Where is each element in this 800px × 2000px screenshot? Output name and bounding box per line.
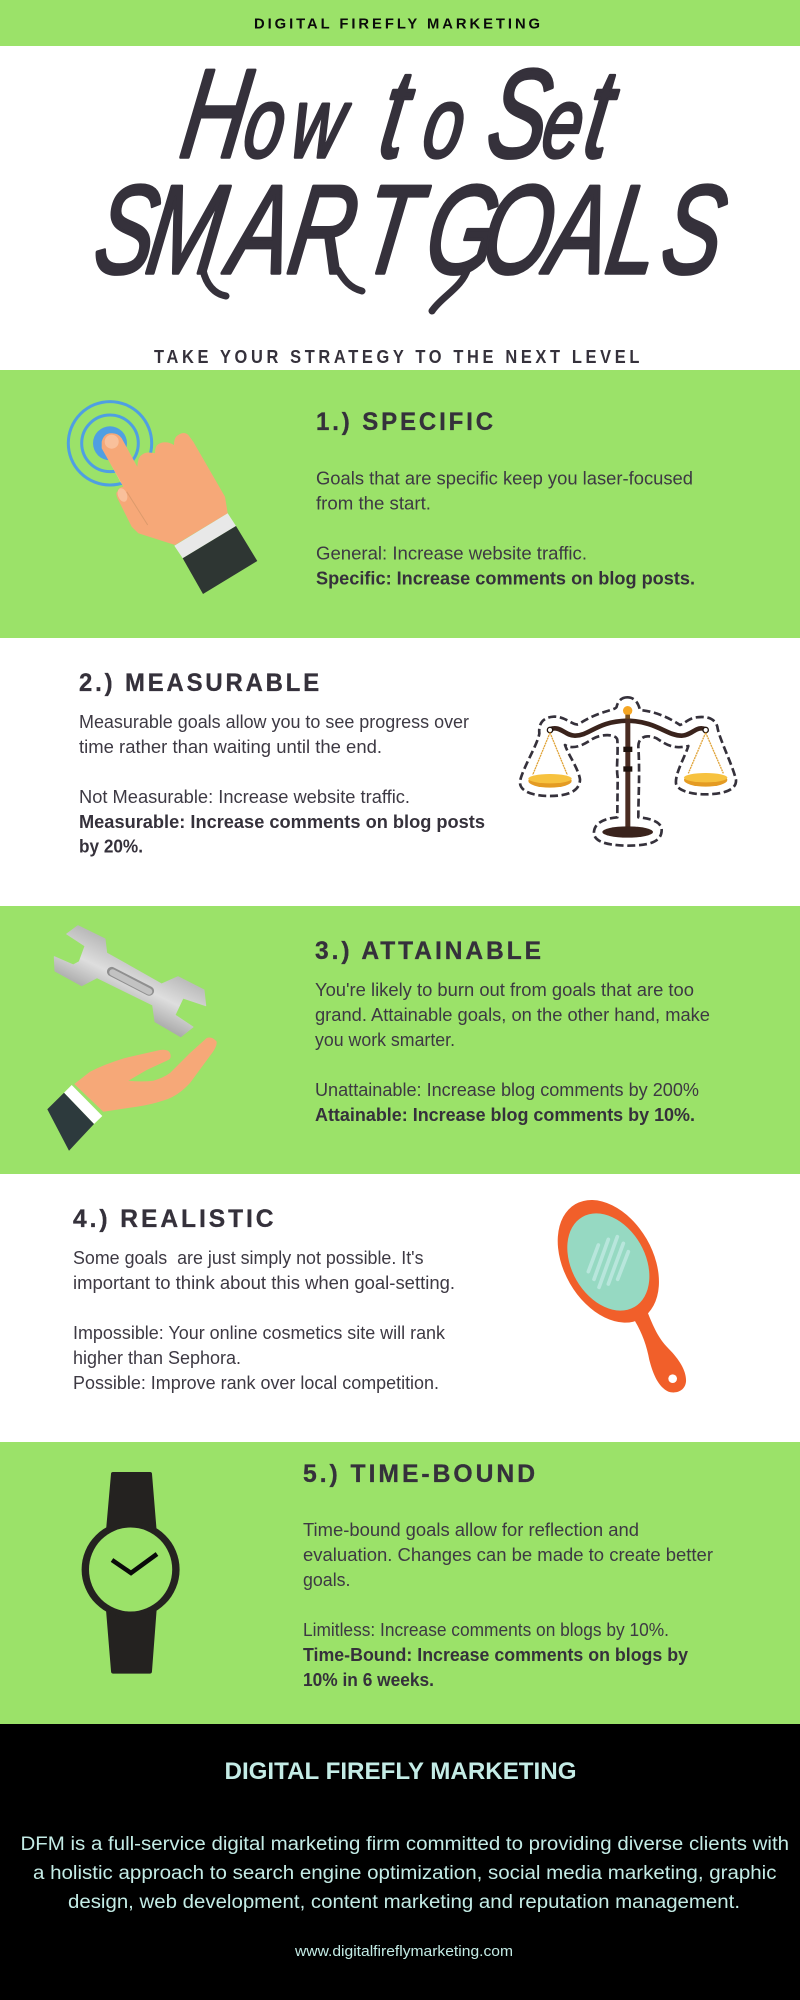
text block: time-bound: goals. xyxy=(303,1570,350,1590)
panel: realistic xyxy=(0,1174,800,1442)
footer description: a holistic approach to search engine optimization, social media marketing, graphic xyxy=(33,1863,777,1884)
icon: pointing hand xyxy=(68,402,257,594)
panel: footer xyxy=(0,1724,800,2000)
text block: realistic: Possible: Improve rank over local competition. xyxy=(73,1373,439,1393)
text block: realistic: higher than Sephora. xyxy=(73,1348,241,1368)
title: o xyxy=(417,67,493,179)
icon: wristwatch xyxy=(82,1472,180,1674)
icon: scales xyxy=(520,697,736,846)
panel: time-bound xyxy=(0,1442,800,1724)
text block: measurable: Measurable goals allow you to see progress over xyxy=(79,712,469,732)
panel: attainable xyxy=(0,906,800,1174)
panel: specific xyxy=(0,370,800,638)
title: o xyxy=(237,67,294,179)
text block: attainable: Unattainable: Increase blog comments by 200% xyxy=(315,1080,699,1100)
icon: open hand xyxy=(47,1037,217,1151)
text block: realistic: Some goals are just simply not possible. It's xyxy=(73,1248,424,1268)
text block: realistic xyxy=(73,1248,455,1393)
title: t xyxy=(372,44,423,185)
text block: specific: Goals that are specific keep you laser-focused xyxy=(316,468,693,488)
footer heading: DIGITAL FIREFLY MARKETING xyxy=(224,1758,576,1785)
top banner: DIGITAL FIREFLY MARKETING xyxy=(254,16,543,32)
panel: measurable xyxy=(0,638,800,906)
text block: time-bound: evaluation. Changes can be made to create better xyxy=(303,1545,713,1565)
heading: specific: 1.) SPECIFIC xyxy=(316,408,496,436)
text block: specific: General: Increase website traffic. xyxy=(316,544,587,564)
text block: measurable: Not Measurable: Increase website traffic. xyxy=(79,787,410,807)
heading: measurable: 2.) MEASURABLE xyxy=(79,669,322,697)
text block: attainable: grand. Attainable goals, on the other hand, make xyxy=(315,1005,710,1025)
heading: attainable: 3.) ATTAINABLE xyxy=(315,937,544,965)
text block: specific: Specific: Increase comments on blog posts. xyxy=(316,568,695,588)
title: t xyxy=(577,44,627,185)
title: S xyxy=(479,44,560,185)
text block: time-bound: 10% in 6 weeks. xyxy=(303,1670,434,1690)
title: e xyxy=(536,67,592,179)
title: SMART GOALS xyxy=(87,160,735,301)
footer url: www.digitalfireflymarketing.com xyxy=(294,1943,513,1960)
subtitle: TAKE YOUR STRATEGY TO THE NEXT LEVEL xyxy=(154,347,643,367)
text block: realistic: Impossible: Your online cosmetics site will rank xyxy=(73,1323,446,1343)
title: w xyxy=(285,67,373,179)
title: H xyxy=(173,44,260,185)
text block: attainable: You're likely to burn out from goals that are too xyxy=(315,980,694,1000)
text block: specific xyxy=(316,468,695,588)
text block: measurable: Measurable: Increase comments on blog posts xyxy=(79,812,485,832)
text block: realistic: important to think about this when goal-setting. xyxy=(73,1273,455,1293)
text block: measurable: by 20%. xyxy=(79,836,143,856)
text block: time-bound: Limitless: Increase comments on blogs by 10%. xyxy=(303,1620,669,1640)
text block: specific: from the start. xyxy=(316,494,431,514)
heading: time-bound: 5.) TIME-BOUND xyxy=(303,1460,538,1488)
text block: measurable xyxy=(79,712,485,856)
top banner xyxy=(0,0,800,46)
icon: wrench xyxy=(54,926,206,1037)
text block: attainable xyxy=(315,980,710,1125)
footer description xyxy=(20,1834,789,1913)
title xyxy=(87,44,735,311)
text block: time-bound: Time-bound goals allow for reflection and xyxy=(303,1520,639,1540)
text block: attainable: Attainable: Increase blog comments by 10%. xyxy=(315,1105,695,1125)
text block: measurable: time rather than waiting until the end. xyxy=(79,737,382,757)
text block: time-bound xyxy=(303,1520,713,1690)
footer description: DFM is a full-service digital marketing firm committed to providing diverse clients with xyxy=(20,1834,789,1855)
icon: hand mirror xyxy=(537,1182,686,1392)
footer description: design, web development, content marketing and reputation management. xyxy=(68,1892,740,1913)
text block: time-bound: Time-Bound: Increase comments on blogs by xyxy=(303,1645,688,1665)
text block: attainable: you work smarter. xyxy=(315,1030,455,1050)
heading: realistic: 4.) REALISTIC xyxy=(73,1205,276,1233)
